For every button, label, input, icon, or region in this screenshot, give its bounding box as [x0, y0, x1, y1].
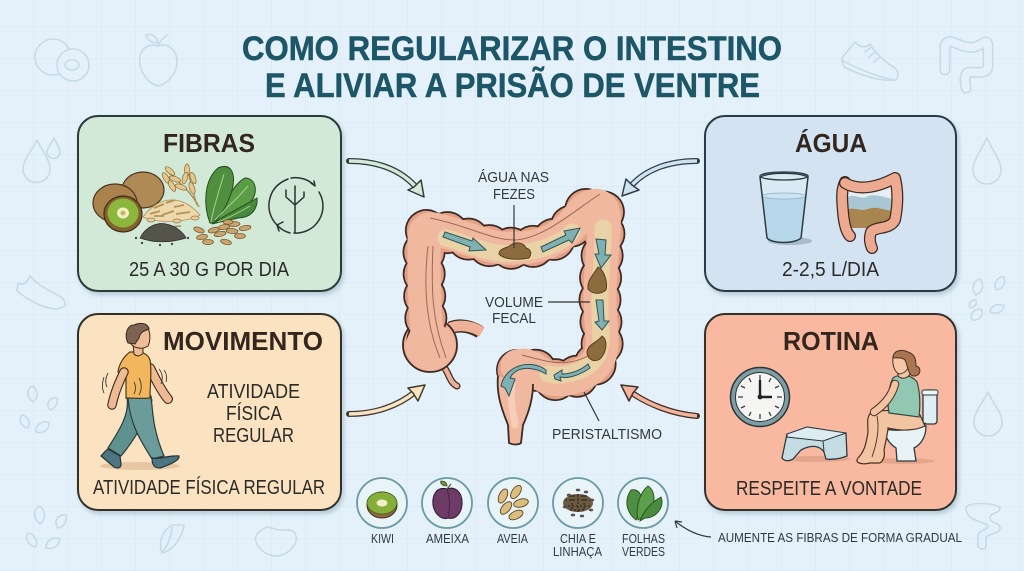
food: kiwi — [357, 478, 407, 546]
icon: flax seeds — [193, 220, 251, 246]
label: peristaltismo — [552, 392, 662, 443]
arrow: rotina to colon — [621, 385, 697, 416]
icon: footstool — [782, 427, 850, 462]
arm — [874, 384, 895, 412]
arrow: água to colon — [622, 161, 697, 196]
colon inner lines — [426, 194, 606, 363]
sigmoid bend outline — [496, 349, 538, 391]
title: COMO REGULARIZAR O INTESTINO — [242, 30, 782, 68]
callout: gradual fibre increase: AUMENTE AS FIBRAS DE FORMA GRADUAL — [718, 531, 962, 545]
label: água nas fezes — [478, 169, 549, 248]
appendix — [443, 366, 457, 386]
back arm — [150, 368, 168, 399]
icon: seated woman — [857, 350, 925, 464]
callout: gradual fibre increase — [675, 521, 962, 545]
head and hair — [897, 360, 910, 378]
icon: kiwis — [93, 172, 164, 232]
label: 25 a 30 g por dia: 25 A 30 G POR DIA — [129, 259, 290, 281]
text: atividade física regular: ATIVIDADE — [207, 381, 300, 403]
food: aveia — [488, 478, 538, 546]
shoes — [101, 449, 121, 468]
heading: movimento: MOVIMENTO — [163, 326, 323, 356]
icon: cycle with plant — [269, 178, 323, 233]
icon: spinach — [206, 167, 257, 224]
food: chia e linhaça: CHIA E — [560, 532, 596, 546]
sigmoid bend rim — [498, 350, 536, 390]
colon outline — [424, 205, 604, 380]
food: folhas verdes: FOLHAS — [622, 532, 665, 546]
food: chia e linhaça — [553, 478, 603, 559]
neck and head — [133, 344, 143, 356]
torso — [118, 352, 151, 398]
panel: movimento — [78, 314, 341, 510]
food strip — [357, 478, 668, 559]
colon wall rim — [424, 205, 604, 380]
text: atividade física regular: FÍSICA — [226, 402, 283, 425]
ileum — [450, 326, 480, 332]
panel: rotina — [705, 314, 956, 510]
text: atividade física regular: REGULAR — [213, 425, 294, 447]
panel: água — [705, 116, 956, 291]
heading: rotina: ROTINA — [783, 326, 879, 356]
icon: clock — [730, 368, 790, 426]
label: água nas fezes: ÁGUA NAS — [478, 169, 549, 186]
panel: fibras — [78, 116, 341, 291]
food: ameixa — [422, 478, 472, 546]
lumen — [446, 228, 603, 375]
label: atividade física regular: ATIVIDADE FÍSICA REGULAR — [93, 476, 325, 499]
rectum — [498, 376, 533, 444]
food: kiwi: KIWI — [371, 532, 394, 546]
food: aveia: AVEIA — [497, 532, 529, 546]
icon: chia pile — [135, 224, 189, 246]
label: água nas fezes: FEZES — [493, 186, 535, 203]
food: folhas verdes — [618, 478, 668, 559]
icon: oats and wheat — [143, 164, 200, 227]
food: ameixa: AMEIXA — [426, 532, 470, 546]
shirt — [888, 375, 920, 417]
label: volume fecal: FECAL — [492, 310, 536, 327]
text: atividade física regular — [207, 381, 300, 447]
label: 2-2,5 l/dia: 2-2,5 L/DIA — [782, 259, 880, 281]
title — [242, 30, 782, 105]
heading: água: ÁGUA — [795, 128, 867, 158]
motion marks — [102, 369, 167, 395]
legs — [857, 411, 925, 464]
icon: glass of water — [760, 172, 812, 245]
label: peristaltismo: PERISTALTISMO — [552, 426, 662, 443]
motility arrows — [443, 228, 611, 396]
rectal lumen shade — [511, 385, 515, 425]
label: volume fecal: VOLUME — [485, 294, 543, 311]
arrow: fibras to colon — [349, 161, 424, 197]
heading: fibras: FIBRAS — [163, 128, 255, 158]
colon wall — [424, 205, 604, 380]
stool: descending upper — [588, 267, 607, 293]
colon illustration — [403, 194, 611, 444]
cecum — [403, 318, 457, 372]
stool: descending lower — [587, 336, 606, 361]
stool: transverse — [499, 243, 531, 259]
label: volume fecal — [485, 294, 590, 327]
label: respeite a vontade: RESPEITE A VONTADE — [736, 478, 922, 500]
food: folhas verdes: VERDES — [622, 545, 665, 559]
icon: walking man — [100, 323, 180, 470]
food: chia e linhaça: LINHAÇA — [553, 545, 603, 559]
icon: toilet — [875, 390, 938, 464]
arrow: movimento to colon — [349, 385, 425, 414]
cecum fill — [406, 322, 454, 370]
icon: small colon with water and stool — [842, 178, 897, 248]
front arm — [112, 372, 124, 405]
title: E ALIVIAR A PRISÃO DE VENTRE — [265, 67, 760, 105]
legs — [108, 397, 152, 456]
